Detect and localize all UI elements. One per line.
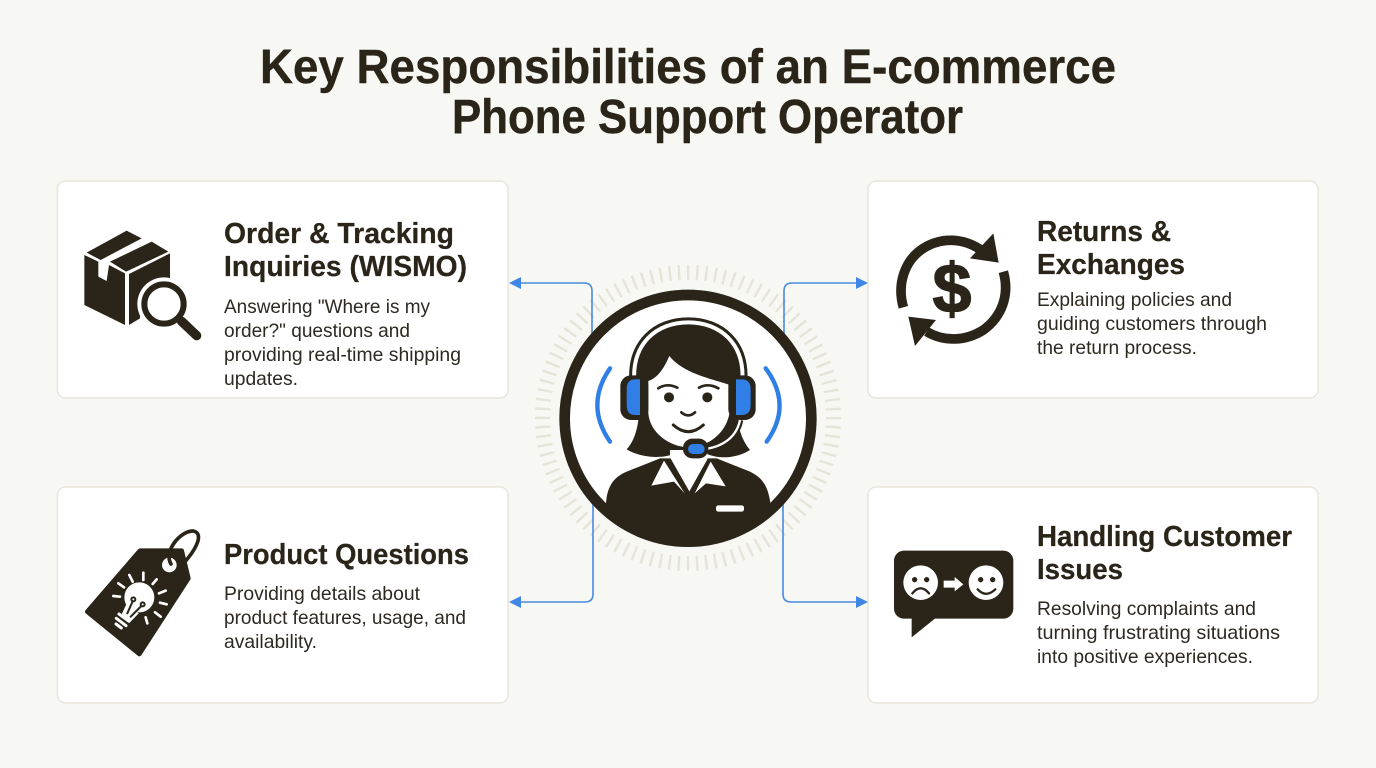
sound wave right [766,368,780,442]
arrow: centre to product questions [509,500,593,608]
panel: returns and exchanges [868,181,1318,398]
facial features [658,385,718,432]
neck [670,450,707,491]
shirt collar [651,461,726,493]
radiating tick ring [542,272,834,564]
title: Key Responsibilities of an E-commerce [260,41,1116,94]
text block [1037,598,1280,668]
text block: turning frustrating situations [1037,622,1280,644]
text block: order?" questions and [224,320,410,342]
sound wave left [597,368,610,442]
heading: Returns & [1037,216,1171,248]
heading: Order & Tracking [224,218,454,250]
text block [224,296,461,390]
panel: order and tracking inquiries [58,181,508,398]
heading [1037,216,1185,281]
arrow: centre to order and tracking [509,277,592,340]
icon: package with magnifying glass [84,231,197,336]
text block: Explaining policies and [1037,289,1232,311]
heading: Handling Customer [1037,521,1292,553]
heading [224,218,467,283]
panel: product questions [58,487,508,703]
panel: handling customer issues [868,487,1318,703]
heading [1037,521,1292,586]
heading: Exchanges [1037,249,1185,281]
text block: providing real-time shipping [224,344,461,366]
headset [620,322,756,458]
title [260,41,1116,144]
avatar circle [565,295,811,542]
name badge [716,505,744,512]
arrow: centre to returns [784,277,868,340]
icon: dollar with circular arrows [901,233,1006,346]
text block: into positive experiences. [1037,646,1253,668]
heading: Issues [1037,554,1123,586]
title: Phone Support Operator [452,91,963,144]
arrow: centre to customer issues [783,500,868,608]
text block [1037,289,1267,359]
heading: Inquiries (WISMO) [224,251,467,283]
text block [224,583,466,653]
icon: price tag with light bulb [87,531,199,654]
text block: updates. [224,368,298,390]
text block: availability. [224,631,317,653]
text block: Answering "Where is my [224,296,430,318]
icon: speech bubble with sad to happy faces [894,551,1013,637]
text block: Providing details about [224,583,421,605]
heading: Product Questions [224,539,469,571]
icon: dollar with circular arrows: $ [933,249,971,327]
text block: the return process. [1037,337,1197,359]
face [648,356,730,447]
central operator illustration [565,295,811,550]
text block: guiding customers through [1037,313,1267,335]
text block: Resolving complaints and [1037,598,1256,620]
hair [627,322,750,457]
operator body [606,458,770,536]
text block: product features, usage, and [224,607,466,629]
